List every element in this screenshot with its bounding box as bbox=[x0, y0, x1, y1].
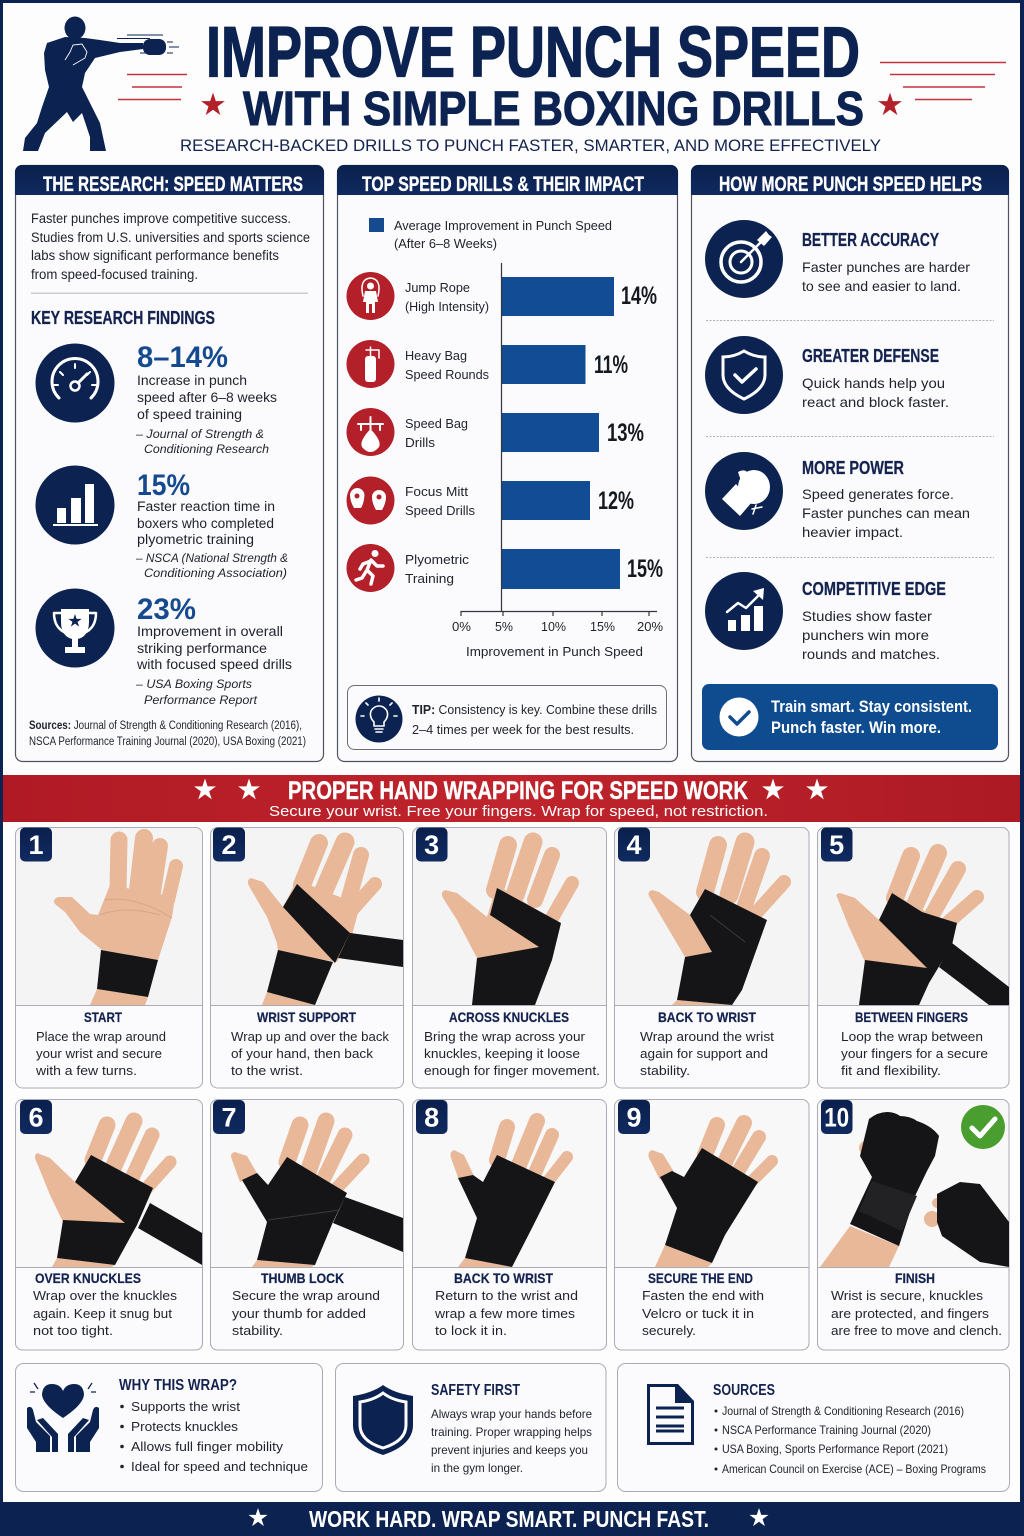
step text: ACROSS KNUCKLES bbox=[449, 1009, 569, 1025]
step text: Wrap up and over the back bbox=[231, 1029, 390, 1044]
safety first text: Always wrap your hands before bbox=[431, 1407, 592, 1421]
step text: are free to move and clench. bbox=[831, 1323, 1002, 1338]
step text: Bring the wrap across your bbox=[424, 1029, 586, 1044]
photo: wrap over knuckles bbox=[35, 1121, 202, 1267]
finding: 8-14%: speed after 6–8 weeks bbox=[137, 390, 277, 405]
benefit: more power bbox=[705, 452, 970, 540]
finding: 15%: boxers who completed bbox=[137, 516, 274, 531]
subtitle: RESEARCH-BACKED DRILLS TO PUNCH FASTER, SMARTER, AND MORE EFFECTIVELY bbox=[180, 137, 881, 155]
benefit: greater defense bbox=[705, 336, 949, 414]
drill: jump rope bbox=[346, 272, 489, 320]
sources text: SOURCES bbox=[713, 1382, 775, 1399]
step text: of your hand, then back bbox=[231, 1046, 374, 1061]
step text: FINISH bbox=[895, 1270, 935, 1286]
icon: green check bbox=[961, 1105, 1005, 1149]
finding: 23%: Improvement in overall bbox=[137, 624, 283, 639]
drill: plyometric training: Training bbox=[405, 571, 454, 586]
bar chart: Improvement in Punch Speed bbox=[466, 644, 643, 659]
finding: 8-14% bbox=[135, 341, 277, 456]
step text: again. Keep it snug but bbox=[33, 1306, 172, 1321]
finding: 23%: striking performance bbox=[137, 641, 267, 656]
step text: wrap a few more times bbox=[434, 1306, 576, 1321]
step text: enough for finger movement. bbox=[424, 1063, 600, 1078]
why this wrap text: Allows full finger mobility bbox=[131, 1439, 284, 1454]
icon: heart in hands bbox=[27, 1383, 99, 1452]
step text: your wrist and secure bbox=[36, 1046, 162, 1061]
bar chart: 0% bbox=[452, 619, 471, 634]
step number: 4 bbox=[626, 830, 642, 860]
sources text: American Council on Exercise (ACE) – Boxing Programs bbox=[722, 1462, 986, 1476]
finding: 8-14%: Conditioning Research bbox=[144, 442, 269, 456]
icon: red stars bbox=[201, 92, 902, 115]
step number: 2 bbox=[221, 830, 237, 860]
sources text: Journal of Strength & Conditioning Research (2016) bbox=[722, 1404, 964, 1418]
title bbox=[206, 14, 864, 136]
icon: document bbox=[647, 1384, 694, 1445]
benefit: competitive edge: COMPETITIVE EDGE bbox=[802, 579, 946, 599]
photo: bare hand with wrist wrap bbox=[54, 838, 176, 1005]
step number bbox=[416, 1100, 448, 1134]
icon: boxer silhouette bbox=[23, 16, 179, 151]
finding: 15%: 15% bbox=[137, 469, 190, 502]
drill: speed bag: Speed Bag bbox=[405, 416, 468, 431]
why this wrap text bbox=[119, 1377, 308, 1474]
callout: tip: 2–4 times per week for the best results. bbox=[412, 722, 634, 737]
finding: 15%: Conditioning Association) bbox=[144, 566, 287, 580]
step 1: start bbox=[16, 828, 202, 1088]
panel: top speed drills bbox=[337, 165, 678, 762]
step 5: between fingers bbox=[818, 828, 1009, 1088]
step number: 10 bbox=[824, 1102, 849, 1132]
benefit: competitive edge: Studies show faster bbox=[802, 608, 932, 624]
benefit: better accuracy bbox=[705, 220, 970, 298]
bar chart: 11% bbox=[594, 351, 628, 379]
finding: 23%: Performance Report bbox=[144, 693, 258, 707]
intro text: from speed-focused training. bbox=[31, 267, 198, 282]
header bbox=[23, 14, 1006, 155]
finding: 23% bbox=[135, 593, 292, 707]
heading: key research findings: KEY RESEARCH FINDINGS bbox=[31, 308, 215, 328]
finding: 23%: with focused speed drills bbox=[136, 657, 292, 672]
step text: WRIST SUPPORT bbox=[257, 1009, 356, 1025]
sources text bbox=[713, 1382, 986, 1476]
benefit: competitive edge: punchers win more bbox=[802, 627, 929, 643]
benefit: more power: Faster punches can mean bbox=[802, 505, 970, 521]
step text: Return to the wrist and bbox=[435, 1288, 578, 1303]
why this wrap text: Ideal for speed and technique bbox=[131, 1459, 308, 1474]
bar chart: 12% bbox=[598, 487, 634, 515]
sources text: NSCA Performance Training Journal (2020) bbox=[722, 1423, 931, 1437]
heading: top speed drills: TOP SPEED DRILLS & THEIR IMPACT bbox=[362, 173, 644, 196]
bar chart: 10% bbox=[541, 619, 566, 634]
callout: tip bbox=[348, 686, 666, 750]
step number bbox=[618, 1100, 650, 1134]
step number bbox=[618, 828, 650, 862]
step text: OVER KNUCKLES bbox=[35, 1270, 141, 1286]
bar chart: 15% bbox=[590, 619, 615, 634]
bar chart: 20% bbox=[637, 619, 663, 634]
step text: Place the wrap around bbox=[36, 1029, 166, 1044]
callout: train smart bbox=[702, 684, 998, 750]
bar chart: 15% bbox=[627, 555, 663, 583]
banner: proper hand wrapping: Secure your wrist. Free your fingers. Wrap for speed, not restriction. bbox=[269, 803, 768, 820]
intro text bbox=[31, 211, 310, 282]
drill: plyometric training: Plyometric bbox=[405, 552, 470, 567]
step text: Secure the wrap around bbox=[232, 1288, 380, 1303]
photo: wrap locked at wrist bbox=[450, 1121, 567, 1267]
benefit: better accuracy: to see and easier to land. bbox=[802, 278, 961, 294]
step 3: across knuckles bbox=[412, 828, 606, 1088]
safety first text: training. Proper wrapping helps bbox=[431, 1425, 592, 1439]
drill: focus mitts: Focus Mitt bbox=[405, 484, 468, 499]
step text: securely. bbox=[642, 1323, 696, 1338]
callout: tip: TIP: Consistency is key. Combine these drills bbox=[412, 702, 657, 717]
step number bbox=[416, 828, 448, 862]
step number bbox=[20, 828, 52, 862]
finding: 8-14%: 8–14% bbox=[137, 341, 228, 374]
step text: THUMB LOCK bbox=[261, 1270, 344, 1286]
step text: again for support and bbox=[640, 1046, 768, 1061]
finding: 15% bbox=[135, 469, 288, 580]
photo: fastened wrap bbox=[648, 1123, 772, 1267]
photo: loop between fingers bbox=[836, 853, 1009, 1005]
step text: START bbox=[84, 1009, 122, 1025]
icon: shield bbox=[353, 1385, 413, 1455]
drill: heavy bag bbox=[346, 340, 489, 388]
step text: not too tight. bbox=[33, 1323, 113, 1338]
step number: 1 bbox=[28, 830, 44, 860]
step text: BETWEEN FINGERS bbox=[855, 1009, 968, 1025]
step text: your fingers for a secure bbox=[841, 1046, 988, 1061]
drill: plyometric training bbox=[346, 544, 470, 592]
icon: speedometer bbox=[36, 344, 114, 422]
step number bbox=[20, 1100, 52, 1134]
safety first text bbox=[431, 1382, 592, 1475]
panel: sources bbox=[618, 1364, 1010, 1492]
step text: Wrap around the wrist bbox=[640, 1029, 774, 1044]
step number: 9 bbox=[626, 1102, 642, 1132]
callout: train smart: Punch faster. Win more. bbox=[771, 718, 941, 737]
step text: to lock it in. bbox=[435, 1323, 507, 1338]
sources note: NSCA Performance Training Journal (2020), USA Boxing (2021) bbox=[29, 736, 306, 748]
photo: wrap back around wrist bbox=[648, 842, 784, 1005]
step number: 7 bbox=[221, 1102, 237, 1132]
footer banner bbox=[0, 1502, 1024, 1536]
step number bbox=[213, 828, 245, 862]
chart legend: Average Improvement in Punch Speed bbox=[394, 218, 612, 233]
photo: two wrapped fists bbox=[820, 1112, 1009, 1267]
step text bbox=[35, 1009, 166, 1078]
finding: 23%: 23% bbox=[137, 593, 196, 626]
finding: 15%: – NSCA (National Strength & bbox=[135, 551, 288, 565]
chart legend: (After 6–8 Weeks) bbox=[394, 236, 497, 251]
step text bbox=[640, 1009, 774, 1078]
step text: Fasten the end with bbox=[642, 1288, 764, 1303]
drill: speed bag: Drills bbox=[405, 435, 436, 450]
benefit: greater defense: Quick hands help you bbox=[802, 375, 945, 391]
intro text: labs show significant performance benefits bbox=[31, 248, 279, 263]
step text bbox=[841, 1009, 988, 1078]
step text bbox=[424, 1009, 600, 1078]
safety first text: in the gym longer. bbox=[431, 1461, 523, 1475]
why this wrap text: Protects knuckles bbox=[131, 1419, 239, 1434]
photo: thumb lock bbox=[231, 1121, 403, 1267]
bar chart: 5% bbox=[495, 619, 513, 634]
panel: the research bbox=[15, 165, 324, 762]
intro text: Studies from U.S. universities and sports science bbox=[31, 230, 310, 245]
finding: 8-14%: of speed training bbox=[137, 407, 242, 422]
step text: knuckles, keeping it loose bbox=[424, 1046, 580, 1061]
step text: BACK TO WRIST bbox=[658, 1009, 756, 1025]
step 8: back to wrist bbox=[412, 1100, 606, 1350]
step 2: wrist support bbox=[210, 828, 404, 1088]
finding: 8-14%: Increase in punch bbox=[137, 373, 247, 388]
safety first text: SAFETY FIRST bbox=[431, 1382, 520, 1399]
photo: wrap over the hand bbox=[248, 842, 403, 1005]
step number bbox=[213, 1100, 245, 1134]
sources note: Sources: Journal of Strength & Conditioning Research (2016), bbox=[29, 720, 302, 732]
finding: 15%: Faster reaction time in bbox=[137, 499, 275, 514]
callout: train smart: Train smart. Stay consistent. bbox=[771, 697, 972, 716]
icon: bar chart bbox=[36, 466, 114, 544]
drill: heavy bag: Heavy Bag bbox=[405, 348, 467, 363]
step number: 5 bbox=[829, 830, 844, 860]
benefit: greater defense: react and block faster. bbox=[802, 394, 949, 410]
safety first text: prevent injuries and keeps you bbox=[431, 1443, 588, 1457]
step text: Wrap over the knuckles bbox=[33, 1288, 178, 1303]
photo: wrap across knuckles bbox=[442, 842, 572, 1005]
benefit: better accuracy: BETTER ACCURACY bbox=[802, 230, 939, 250]
banner: proper hand wrapping: PROPER HAND WRAPPING FOR SPEED WORK bbox=[288, 777, 748, 805]
panel: why this wrap bbox=[16, 1364, 322, 1492]
step text: Wrist is secure, knuckles bbox=[831, 1288, 984, 1303]
sources text: USA Boxing, Sports Performance Report (2021) bbox=[722, 1442, 948, 1456]
drill: focus mitts bbox=[346, 476, 475, 524]
panel: how punch speed helps bbox=[691, 165, 1009, 762]
benefit: more power: heavier impact. bbox=[802, 524, 903, 540]
step text: stability. bbox=[640, 1063, 690, 1078]
step 10: finish bbox=[818, 1100, 1009, 1350]
drill: heavy bag: Speed Rounds bbox=[405, 367, 489, 382]
drill: focus mitts: Speed Drills bbox=[405, 503, 475, 518]
sources note bbox=[29, 720, 306, 748]
icon: trophy bbox=[36, 588, 114, 668]
step 4: back to wrist bbox=[614, 828, 809, 1088]
speed lines bbox=[118, 62, 1006, 100]
banner: proper hand wrapping bbox=[3, 775, 1020, 822]
benefit: more power: Speed generates force. bbox=[802, 486, 954, 502]
step text: with a few turns. bbox=[35, 1063, 137, 1078]
step 9: secure the end bbox=[614, 1100, 809, 1350]
panel: safety first bbox=[336, 1364, 606, 1492]
step text: are protected, and fingers bbox=[831, 1306, 990, 1321]
step text bbox=[231, 1009, 390, 1078]
finding: 23%: – USA Boxing Sports bbox=[135, 677, 252, 691]
drill: speed bag bbox=[346, 408, 468, 456]
heading: the research: THE RESEARCH: SPEED MATTERS bbox=[43, 173, 303, 196]
step number bbox=[821, 828, 852, 862]
finding: 8-14%: – Journal of Strength & bbox=[135, 427, 264, 441]
step text bbox=[33, 1270, 178, 1338]
benefit: more power: MORE POWER bbox=[802, 458, 904, 478]
step text bbox=[831, 1270, 1002, 1338]
bar chart: 14% bbox=[621, 282, 657, 310]
benefit: competitive edge bbox=[705, 572, 946, 662]
title: WITH SIMPLE BOXING DRILLS bbox=[243, 83, 864, 136]
benefit: better accuracy: Faster punches are harder bbox=[802, 259, 970, 275]
step number: 6 bbox=[28, 1102, 44, 1132]
bar chart bbox=[452, 263, 663, 659]
step 7: thumb lock bbox=[210, 1100, 404, 1350]
benefit: greater defense: GREATER DEFENSE bbox=[802, 346, 939, 366]
footer banner: WORK HARD. WRAP SMART. PUNCH FAST. bbox=[309, 1506, 709, 1532]
finding: 15%: plyometric training bbox=[137, 532, 254, 547]
step number: 3 bbox=[424, 830, 439, 860]
step text: your thumb for added bbox=[232, 1306, 366, 1321]
benefit: competitive edge: rounds and matches. bbox=[802, 646, 940, 662]
step text bbox=[434, 1270, 578, 1338]
step text: to the wrist. bbox=[231, 1063, 303, 1078]
drill: jump rope: Jump Rope bbox=[405, 280, 470, 295]
step text bbox=[232, 1270, 380, 1338]
bar chart: 13% bbox=[607, 419, 644, 447]
step text: Velcro or tuck it in bbox=[642, 1306, 754, 1321]
drill: jump rope: (High Intensity) bbox=[405, 299, 489, 314]
intro text: Faster punches improve competitive success. bbox=[31, 211, 291, 226]
step text: stability. bbox=[232, 1323, 283, 1338]
step text: SECURE THE END bbox=[648, 1270, 753, 1286]
step text: Loop the wrap between bbox=[841, 1029, 983, 1044]
why this wrap text: WHY THIS WRAP? bbox=[119, 1377, 237, 1394]
step text: fit and flexibility. bbox=[841, 1063, 941, 1078]
why this wrap text: Supports the wrist bbox=[131, 1399, 240, 1414]
chart legend bbox=[369, 218, 612, 251]
step text: BACK TO WRIST bbox=[454, 1270, 553, 1286]
step text bbox=[642, 1270, 764, 1338]
step 6: over knuckles bbox=[16, 1100, 202, 1350]
step number: 8 bbox=[424, 1102, 439, 1132]
